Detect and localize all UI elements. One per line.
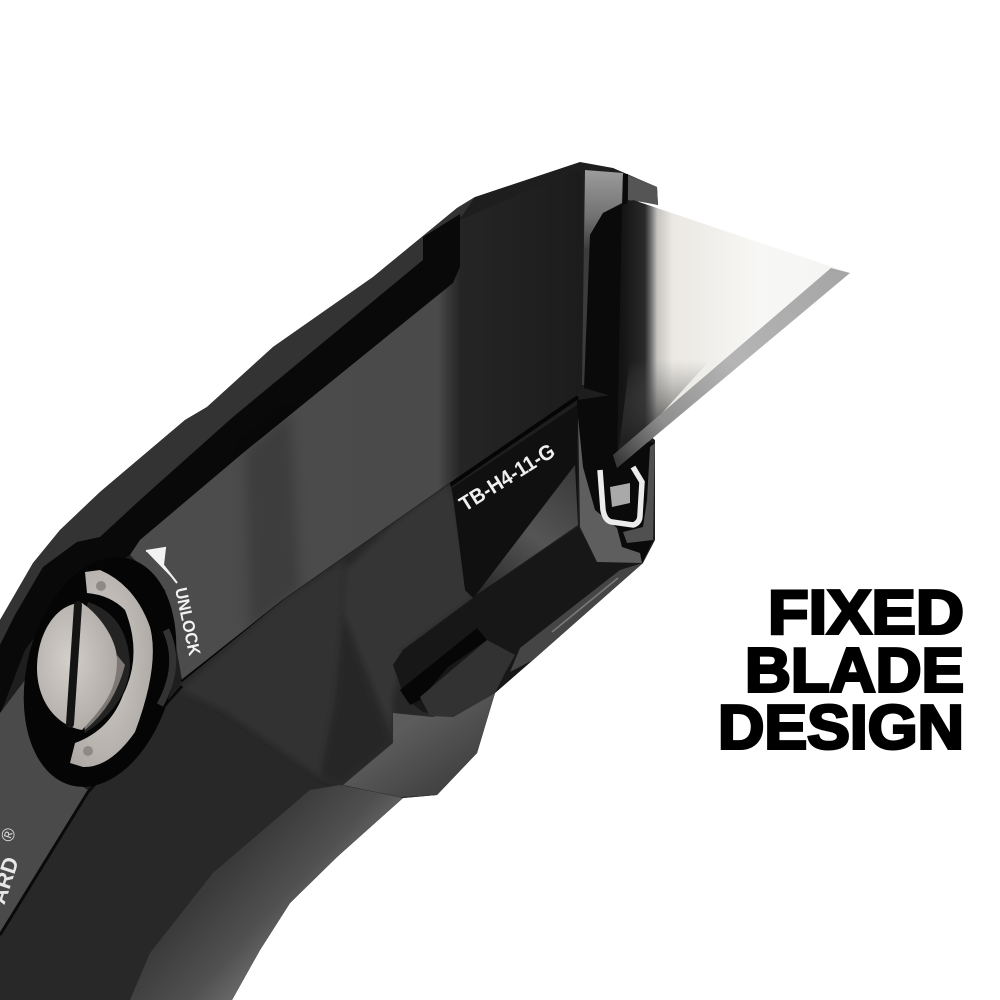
lock knob xyxy=(1,541,199,803)
slider button xyxy=(420,640,515,717)
model label panel xyxy=(452,405,578,598)
front grip facet xyxy=(343,483,473,743)
blade slot frame xyxy=(577,392,655,563)
heading: fixed blade design: FIXED xyxy=(768,578,964,648)
top side panel xyxy=(130,170,583,680)
lower-left panel xyxy=(0,680,88,933)
blade cutting bevel xyxy=(613,268,850,468)
blade holder frame xyxy=(582,170,658,398)
right frame strip xyxy=(623,443,655,543)
model number: TB-H4-11-G xyxy=(455,440,559,516)
silver C ring xyxy=(70,570,153,767)
left frame strip xyxy=(578,417,642,563)
upper grip surface xyxy=(186,566,342,772)
lower lip xyxy=(343,693,495,797)
chrome crescent xyxy=(82,602,130,733)
disc slot xyxy=(70,605,78,724)
unlock text: UNLOCK xyxy=(171,586,204,658)
lower nose xyxy=(393,527,643,717)
right-hand lit band xyxy=(130,785,403,1000)
knife body silhouette xyxy=(0,162,658,1000)
heading: fixed blade design: BLADE xyxy=(745,636,964,706)
dark triangle facet xyxy=(322,628,390,782)
blade xyxy=(613,200,850,468)
lit lower facet xyxy=(510,563,643,672)
clamp block xyxy=(610,483,630,507)
heading: fixed blade design xyxy=(718,578,964,762)
panel dark parting line xyxy=(182,397,578,682)
panel reflection band xyxy=(245,412,300,630)
label facet highlight xyxy=(475,465,578,596)
black groove xyxy=(0,214,460,715)
slotted disc xyxy=(37,603,117,730)
white blade clamp xyxy=(600,467,642,525)
rubber grip xyxy=(0,483,495,1000)
heading: fixed blade design: DESIGN xyxy=(718,694,964,762)
unlock arrow xyxy=(146,548,177,583)
utility knife xyxy=(0,162,850,1000)
slider slot xyxy=(400,628,487,705)
knob recess xyxy=(1,541,199,803)
outer chrome edge xyxy=(160,630,173,705)
upper back strip xyxy=(0,197,475,645)
rivets xyxy=(96,581,106,591)
grip seam xyxy=(0,686,182,935)
